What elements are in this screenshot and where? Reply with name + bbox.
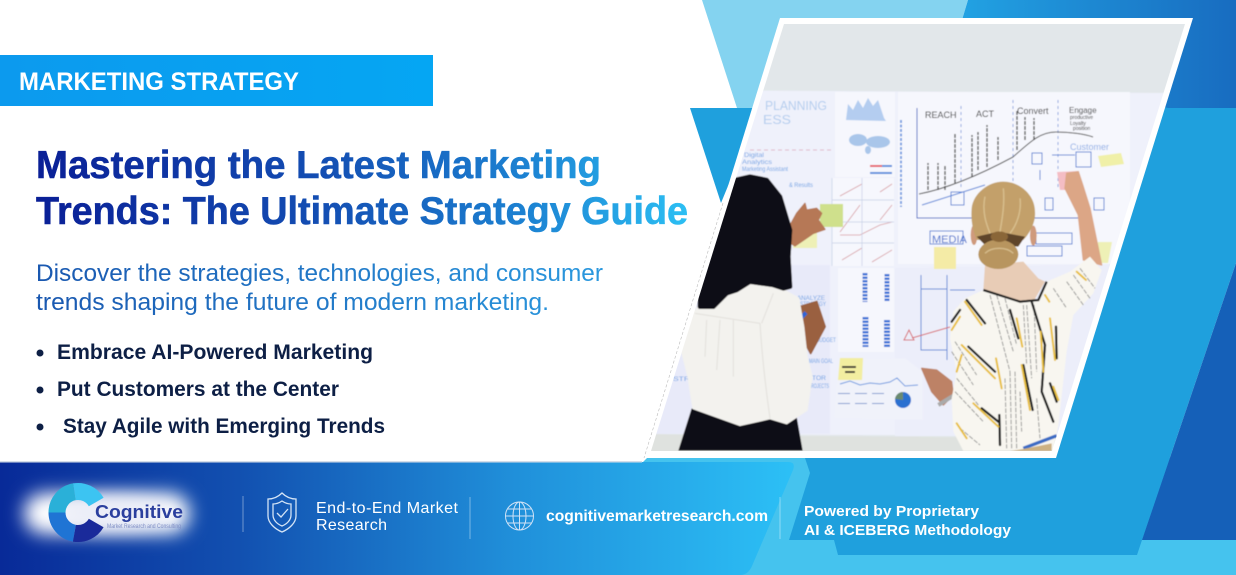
blue handwritten notes: TOR xyxy=(812,376,827,382)
area chart xyxy=(846,98,886,121)
title: Mastering the Latest Marketing xyxy=(36,144,601,187)
bullet list xyxy=(36,341,385,438)
blue handwritten notes: BUDGET xyxy=(816,338,836,344)
planning sheet text: ESS xyxy=(763,112,791,127)
bun xyxy=(978,240,1018,269)
belt xyxy=(1023,436,1057,448)
blue handwritten notes: ROJECTS xyxy=(811,384,829,390)
photo: two women at a strategy whiteboard: productive xyxy=(1070,115,1093,121)
sticky notes xyxy=(820,204,843,227)
icon: globe xyxy=(506,502,534,530)
research label: End-to-End Market xyxy=(316,500,459,517)
blue handwritten notes: STRATEGY xyxy=(800,302,826,308)
blue handwritten notes: Analytics xyxy=(742,160,772,166)
curly hair xyxy=(700,177,790,307)
dashboard sheet xyxy=(834,358,923,420)
planning sheet text xyxy=(764,100,826,124)
bullet list: Put Customers at the Center xyxy=(57,378,339,401)
photo: two women at a strategy whiteboard: Engage xyxy=(1069,106,1097,115)
title: Trends: The Ultimate Strategy Guide xyxy=(36,190,688,233)
whiteboard paper xyxy=(736,90,1164,436)
blue handwritten notes: MAIN GOAL xyxy=(809,359,833,365)
photo: two women at a strategy whiteboard: Customer xyxy=(1070,142,1109,152)
customer icons xyxy=(922,152,1104,210)
red triangle sketch xyxy=(904,327,950,340)
fine stripes xyxy=(952,268,1095,448)
photo: two women at a strategy whiteboard: ACT xyxy=(976,109,995,119)
front hand xyxy=(922,368,953,405)
subtitle xyxy=(36,260,603,316)
right woman xyxy=(922,172,1102,451)
methodology note: AI & ICEBERG Methodology xyxy=(804,522,1012,539)
divider lines xyxy=(243,496,780,539)
funnel sheet xyxy=(917,100,1083,218)
left woman xyxy=(678,177,825,451)
ears xyxy=(971,225,1037,246)
website: cognitivemarketresearch.com xyxy=(546,508,768,525)
logo: Cognitive xyxy=(95,502,183,522)
blue handwritten notes: Digital xyxy=(744,153,764,159)
photo frame xyxy=(644,18,1193,458)
photo: two women at a strategy whiteboard: REACH xyxy=(925,110,957,120)
bullet list: Embrace AI-Powered Marketing xyxy=(57,341,373,364)
photo: two women at a strategy whiteboard: MEDIA xyxy=(932,234,968,246)
header band xyxy=(0,55,433,106)
methodology note: Powered by Proprietary xyxy=(804,503,980,520)
header band: MARKETING STRATEGY xyxy=(19,68,299,96)
blue handwritten notes: Marketing Assistant xyxy=(742,167,788,173)
logo: Market Research and Consulting xyxy=(107,524,181,530)
subtitle: trends shaping the future of modern marketing. xyxy=(36,289,549,316)
skirt xyxy=(678,408,803,451)
planning sheet text: PLANNING xyxy=(765,98,827,113)
bar tables xyxy=(865,273,887,347)
blue handwritten notes: & Results xyxy=(789,183,813,189)
research label xyxy=(316,500,459,534)
raised hand xyxy=(788,203,825,246)
footer bar xyxy=(0,461,794,575)
research label: Research xyxy=(316,517,387,534)
striped blouse xyxy=(950,257,1102,451)
blouse xyxy=(682,282,812,425)
logo xyxy=(24,491,190,534)
blue handwritten notes: ANALYZE xyxy=(797,296,825,302)
photo: two women at a strategy whiteboard: Convert xyxy=(1017,106,1049,116)
subtitle: Discover the strategies, technologies, and consumer xyxy=(36,260,603,287)
icon: shield xyxy=(268,493,296,532)
photo: two women at a strategy whiteboard: position xyxy=(1073,126,1090,132)
lower hand xyxy=(800,302,825,353)
neck and back xyxy=(983,262,1045,302)
hair xyxy=(971,182,1035,240)
line charts xyxy=(840,184,892,262)
frame hairline xyxy=(644,203,723,458)
world map xyxy=(849,134,890,154)
floor xyxy=(651,434,1052,451)
media sheet xyxy=(930,231,963,244)
photo: two women at a strategy whiteboard: Loyalty xyxy=(1070,121,1086,127)
methodology note xyxy=(804,503,1012,539)
blue handwritten notes xyxy=(673,153,836,390)
photo: two women at a strategy whiteboard xyxy=(640,20,1200,455)
raised arm xyxy=(1065,172,1102,265)
blue handwritten notes: STR xyxy=(673,377,691,383)
bullet list: Stay Agile with Emerging Trends xyxy=(63,415,385,438)
title xyxy=(36,144,688,233)
